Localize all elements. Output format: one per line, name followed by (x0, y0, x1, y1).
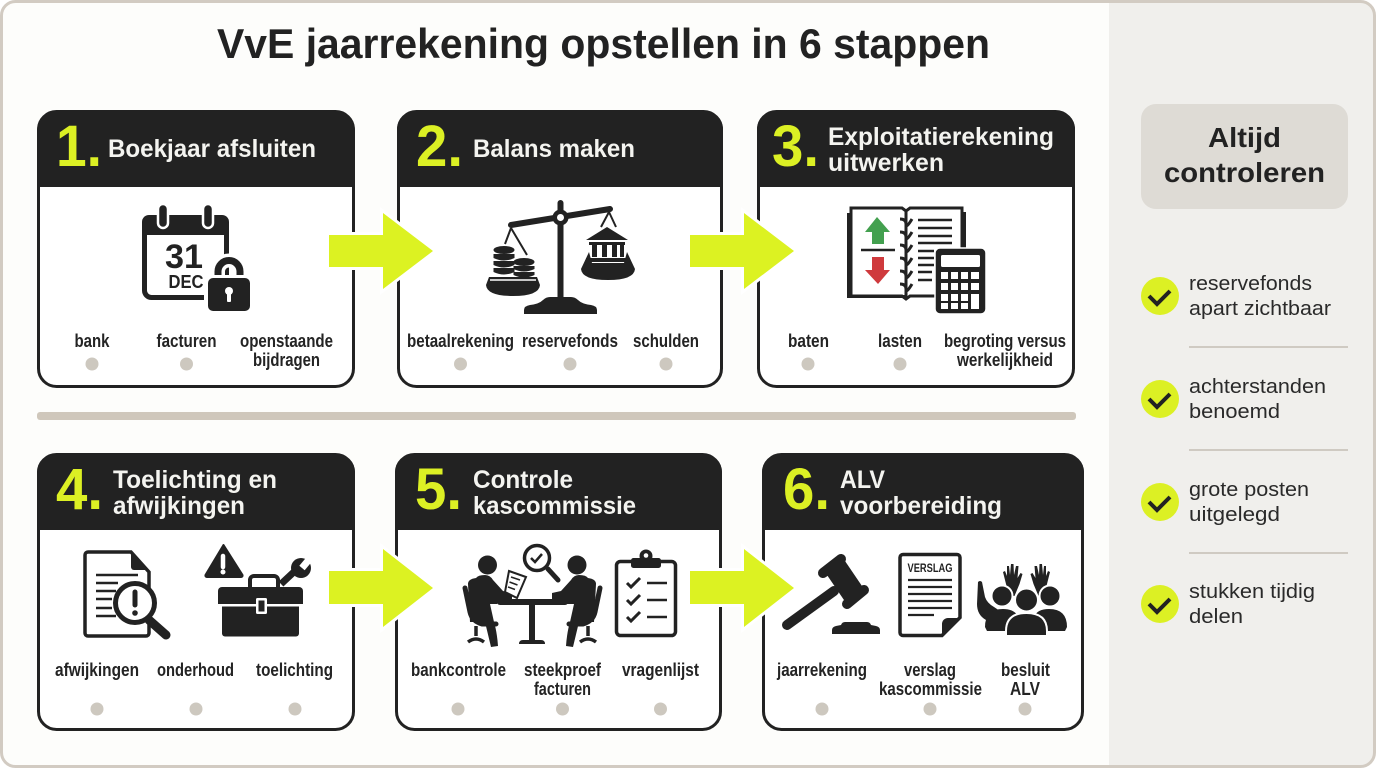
arrow: step 1 to 2 (329, 213, 433, 289)
step 3 heading (828, 123, 1054, 177)
labels: step 3: begroting versus (944, 330, 1066, 351)
labels: step 4: toelichting (256, 659, 333, 680)
check item: reservefonds: apart zichtbaar (1189, 298, 1331, 320)
sidebar heading: controleren (1164, 157, 1325, 188)
step 4 heading (113, 466, 277, 520)
icon: balance scale (486, 200, 635, 314)
panel: step 3 (757, 111, 1075, 386)
check item: achterstanden: achterstanden (1189, 376, 1326, 398)
check item: achterstanden: benoemd (1189, 401, 1280, 423)
title: VvE jaarrekening opstellen in 6 stappen (217, 20, 990, 67)
check item: stukken tijdig delen (1141, 581, 1315, 628)
labels: step 6: ALV (1010, 678, 1041, 699)
step 5 heading (473, 466, 636, 520)
step 4 heading: afwijkingen (113, 492, 245, 520)
labels: step 2: betaalrekening (407, 330, 514, 351)
icon: group with raised hands (977, 564, 1067, 636)
check item: reservefonds (1141, 273, 1331, 320)
step 2 number: 2. (416, 114, 463, 179)
step 3 heading: uitwerken (828, 149, 944, 177)
icon: calendar with lock: DEC (168, 272, 204, 292)
labels: step 2: reservefonds (522, 330, 618, 351)
labels: step 5 (411, 659, 699, 716)
labels: step 1 (74, 330, 333, 370)
labels: step 3: baten (788, 330, 829, 351)
step 6 heading: voorbereiding (840, 492, 1002, 520)
labels: step 1: facturen (156, 330, 216, 351)
icon: calendar with lock (142, 204, 254, 314)
icon: clipboard checklist (616, 550, 676, 636)
step 1 number: 1. (56, 114, 102, 179)
labels: step 1: bank (74, 330, 110, 351)
icon: verslag report (900, 554, 960, 636)
arrow: step 5 to 6 (690, 549, 794, 627)
check item: reservefonds: reservefonds (1189, 273, 1312, 295)
labels: step 4: afwijkingen (55, 659, 139, 680)
labels: step 5: steekproef (524, 659, 602, 680)
step 6 heading (840, 466, 1002, 520)
labels: step 6: jaarrekening (776, 659, 867, 680)
check item: stukken tijdig delen: stukken tijdig (1189, 581, 1315, 603)
labels: step 2: schulden (633, 330, 699, 351)
panel: step 6 (762, 454, 1084, 730)
labels: step 3: lasten (878, 330, 922, 351)
panel: step 5 (395, 454, 722, 730)
check item: stukken tijdig delen: delen (1189, 606, 1243, 628)
icon: meeting at table with magnifier (465, 546, 600, 647)
panel: step 2 (397, 111, 723, 386)
step 4 heading: Toelichting en (113, 466, 277, 494)
check item: grote posten: grote posten (1189, 479, 1309, 501)
arrow: step 4 to 5 (329, 549, 433, 627)
step 5 heading: Controle (473, 466, 573, 494)
check item: grote posten (1141, 479, 1309, 526)
labels: step 3 (788, 330, 1066, 370)
labels: step 2 (407, 330, 699, 370)
panel: step 1 (38, 111, 354, 386)
sidebar heading (1141, 104, 1348, 209)
labels: step 6: verslag (904, 659, 956, 680)
step 5 number: 5. (415, 457, 462, 522)
labels: step 4 (55, 659, 333, 716)
labels: step 4: onderhoud (157, 659, 234, 680)
check item: achterstanden (1141, 376, 1326, 423)
labels: step 5: vragenlijst (622, 659, 699, 680)
panel: step 4 (37, 454, 355, 730)
icon: calendar with lock: 31 (165, 238, 203, 276)
icon: document with magnifier (85, 552, 166, 636)
labels: step 1: openstaande (240, 330, 333, 351)
labels: step 1: bijdragen (253, 349, 320, 370)
step 6 number: 6. (783, 457, 830, 522)
sidebar heading: Altijd (1208, 122, 1281, 153)
step 6 heading: ALV (840, 466, 885, 494)
panel: altijd controleren sidebar (1141, 104, 1348, 628)
check item: grote posten: uitgelegd (1189, 504, 1280, 526)
labels: step 6 (776, 659, 1050, 716)
step 3 number: 3. (772, 114, 819, 179)
labels: step 5: facturen (534, 678, 591, 699)
icon: gavel (787, 559, 880, 634)
labels: step 3: werkelijkheid (956, 349, 1053, 370)
icon: ledger with calculator (847, 208, 986, 314)
step 4 number: 4. (56, 457, 103, 522)
step 1 heading: Boekjaar afsluiten (108, 135, 316, 163)
labels: step 6: besluit (1001, 659, 1050, 680)
step 2 heading: Balans maken (473, 135, 635, 163)
divider between rows (37, 412, 1076, 420)
arrow: step 2 to 3 (690, 213, 794, 289)
icon: toolbox with warning and wrench (205, 545, 312, 636)
step 3 heading: Exploitatierekening (828, 123, 1054, 151)
labels: step 6: kascommissie (879, 678, 982, 699)
icon: verslag report: VERSLAG (908, 561, 952, 575)
step 5 heading: kascommissie (473, 492, 636, 520)
labels: step 5: bankcontrole (411, 659, 506, 680)
